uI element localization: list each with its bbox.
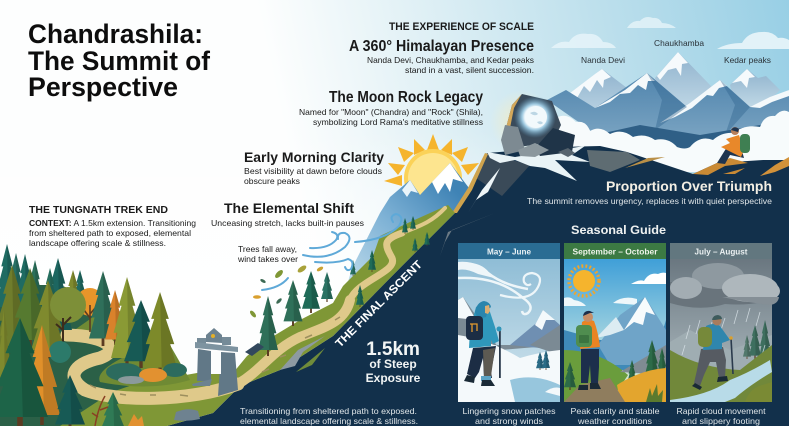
blue slope with snow peak in front of sun: [345, 163, 480, 300]
panel: July to August: [670, 243, 780, 402]
text block: moon rock legacy: Named for "Moon" (Chandra) and "Rock" (Shila),: [299, 107, 483, 117]
caption: July to August: [676, 406, 766, 426]
text block: early morning clarity: Best visibility at dawn before clouds: [244, 166, 382, 176]
text block: early morning clarity: obscure peaks: [244, 176, 300, 186]
captions: seasonal guide: [462, 406, 766, 426]
peak labels: Chaukhamba: [654, 38, 704, 48]
title: Chandrashila:: [28, 19, 203, 49]
text block: moon rock legacy: The Moon Rock Legacy: [329, 89, 483, 106]
text block: moon rock legacy: symbolizing Lord Rama's meditative stillness: [313, 117, 483, 127]
text block: the experience of scale: THE EXPERIENCE OF SCALE: [389, 21, 534, 33]
panel header: May to June: May – June: [487, 246, 531, 256]
illustration: rain and clouds: [670, 259, 772, 402]
title: [28, 19, 210, 102]
text block: the experience of scale: stand in a vast, silent succession.: [405, 65, 534, 75]
bushes and rock in the trail loop: [106, 363, 187, 384]
panel: September to October: [564, 243, 667, 402]
illustration: clear sky: [564, 259, 667, 402]
text block: tungnath trek end: THE TUNGNATH TREK END: [29, 204, 168, 216]
heading: seasonal guide: Seasonal Guide: [571, 223, 666, 237]
caption: September to October: [570, 406, 660, 426]
text block: proportion over triumph: Proportion Over Triumph: [606, 178, 772, 194]
summit rock faces: [452, 146, 665, 213]
title: The Summit of: [28, 46, 210, 76]
icon: wind gusts and leaves: [249, 214, 401, 318]
stat: 1.5km of steep exposure: of Steep: [369, 357, 417, 371]
hiker: September to October: [576, 311, 601, 390]
caption: July to August: and slippery footing: [682, 416, 760, 426]
hillside with trail: [0, 205, 455, 426]
mountain: Kedar peaks: [730, 69, 780, 110]
icon: stone gate: [192, 328, 238, 396]
text block: elemental shift: Unceasing stretch, lacks built-in pauses: [211, 218, 364, 228]
panel header: May to June: [458, 243, 560, 259]
caption: May to June: Lingering snow patches: [462, 406, 556, 416]
panel header: September to October: September – October: [572, 246, 658, 256]
icon: moon rock: [490, 90, 575, 157]
caption: July to August: Rapid cloud movement: [676, 406, 766, 416]
sky clouds: [551, 17, 789, 49]
label: the final ascent: THE FINAL ASCENT: [334, 259, 425, 350]
peak labels: Nanda Devi: [581, 55, 625, 65]
illustration: snow and wind: [458, 259, 560, 402]
text block: the experience of scale: [349, 21, 534, 75]
caption: bottom transition text: Transitioning from sheltered path to exposed.: [240, 406, 417, 416]
text block: tungnath trek end: landscape offering scale & stillness.: [29, 238, 166, 248]
panel: May to June: [458, 243, 560, 402]
icon: sun: [384, 134, 479, 207]
stat: 1.5km of steep exposure: Exposure: [366, 371, 421, 385]
icon: seated hiker on summit: [693, 127, 789, 176]
caption: May to June: and strong winds: [475, 416, 543, 426]
distant Himalayan mountains: [547, 52, 789, 170]
storm clouds: [670, 263, 780, 308]
text block: early morning clarity: Early Morning Clarity: [244, 149, 384, 165]
text block: tungnath trek end: [29, 204, 196, 248]
text block: early morning clarity: [244, 149, 384, 186]
forest: [0, 216, 430, 426]
title: Perspective: [28, 72, 178, 102]
stat: 1.5km of steep exposure: 1.5km: [366, 339, 420, 360]
peak labels: Kedar peaks: [724, 55, 771, 65]
text block: elemental shift: The Elemental Shift: [224, 200, 354, 216]
main dark mountain mass: [167, 146, 789, 426]
text block: moon rock legacy: [299, 89, 483, 127]
text block: elemental shift: [211, 200, 364, 228]
text block: the experience of scale: A 360° Himalayan Presence: [349, 38, 534, 55]
rocky streaks on dark slope: [245, 213, 495, 372]
peak labels: [581, 38, 771, 65]
hiker: May to June: [464, 301, 502, 386]
trail: [67, 208, 445, 398]
caption: September to October: Peak clarity and stable: [570, 406, 660, 416]
mountain: Chaukhamba: [655, 52, 725, 115]
text block: tungnath trek end: from sheltered path to exposed, elemental: [29, 228, 191, 238]
panel header: July to August: July – August: [694, 246, 748, 256]
text block: tungnath trek end: CONTEXT: A 1.5km extension. Transitioning: [29, 218, 196, 228]
clouds around the summit: [556, 111, 789, 172]
text block: the experience of scale: Nanda Devi, Chaukhamba, and Kedar peaks: [367, 55, 534, 65]
caption: May to June: [462, 406, 556, 426]
caption: bottom transition text: [240, 406, 418, 426]
annotation: trees fall away: wind takes over: [237, 254, 298, 264]
text block: proportion over triumph: [527, 178, 772, 206]
hiker: July to August: [692, 315, 733, 390]
stat: 1.5km of steep exposure: [366, 339, 421, 385]
text block: proportion over triumph: The summit removes urgency, replaces it with quiet perspective: [527, 196, 772, 206]
caption: September to October: weather conditions: [577, 416, 652, 426]
mountain: Nanda Devi: [560, 69, 640, 125]
annotation: trees fall away: Trees fall away,: [238, 244, 297, 254]
mountain range foreground: [547, 73, 789, 170]
panel header: July to August: [670, 243, 772, 259]
panel header: September to October: [564, 243, 666, 259]
caption: bottom transition text: elemental landscape offering scale & stillness.: [240, 416, 418, 426]
annotation: trees fall away: [237, 244, 298, 264]
